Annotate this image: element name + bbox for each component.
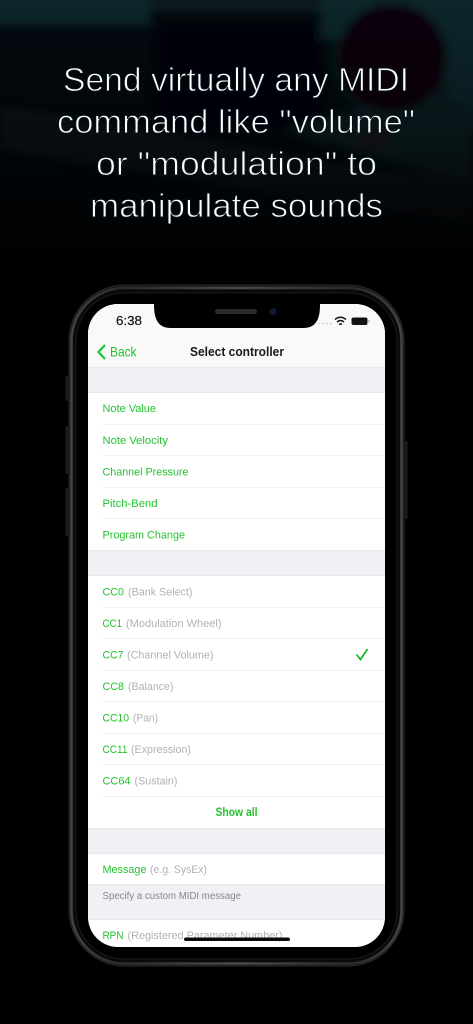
icon: checkmark — [356, 649, 368, 660]
phone body — [66, 285, 408, 966]
navigation bar background — [88, 304, 385, 334]
list: CC controllers: CC10 — [102, 712, 129, 724]
list: CC controllers: (Balance) — [128, 681, 174, 693]
list: CC controllers: (Expression) — [131, 744, 191, 756]
icon: wifi — [335, 317, 346, 324]
RPN row: RPN — [102, 930, 124, 942]
list: CC controllers: (Pan) — [133, 712, 158, 724]
home indicator — [184, 938, 290, 941]
title: manipulate sounds — [90, 188, 383, 225]
list: CC controllers — [102, 586, 222, 788]
back button: Back — [110, 344, 137, 360]
signal dots — [318, 323, 332, 324]
list: CC controllers: CC11 — [102, 744, 128, 756]
phone screen — [88, 304, 385, 947]
list: CC controllers: (Channel Volume) — [127, 650, 214, 662]
list: basic commands: Note Value — [102, 403, 156, 415]
list: CC controllers: (Sustain) — [134, 776, 178, 788]
list: CC controllers: (Modulation Wheel) — [126, 618, 222, 630]
list: basic commands: Channel Pressure — [102, 466, 188, 478]
back button — [98, 344, 137, 360]
show all button: Show all — [216, 806, 258, 819]
list: CC controllers: (Bank Select) — [128, 586, 193, 598]
message row: (e.g. SysEx) — [150, 864, 207, 876]
title: command like "volume" — [57, 104, 415, 141]
message row — [102, 864, 207, 876]
list: basic commands: Pitch-Bend — [102, 498, 158, 510]
title: or "modulation" to — [96, 146, 377, 183]
notch — [154, 304, 320, 328]
list: CC controllers: CC7 — [102, 650, 124, 662]
nav title: Select controller — [190, 345, 284, 359]
title — [57, 62, 415, 225]
grouped section gaps — [88, 367, 385, 919]
blurred studio photo background — [0, 0, 473, 290]
status bar time: 6:38 — [116, 314, 142, 328]
list: basic commands: Note Velocity — [102, 435, 168, 447]
message row: Message — [102, 864, 146, 876]
icon: battery — [352, 318, 370, 325]
RPN row: (Registered Parameter Number) — [128, 930, 283, 942]
title: Send virtually any MIDI — [63, 62, 409, 99]
list: CC controllers: CC0 — [102, 586, 124, 598]
list: basic commands — [102, 403, 188, 542]
message hint: Specify a custom MIDI message — [102, 891, 242, 902]
list: CC controllers: CC8 — [102, 681, 124, 693]
camera — [270, 308, 276, 315]
list: CC controllers: CC1 — [102, 618, 122, 630]
list: basic commands: Program Change — [102, 530, 185, 542]
speaker — [215, 309, 257, 314]
list: CC controllers: CC64 — [102, 776, 130, 788]
